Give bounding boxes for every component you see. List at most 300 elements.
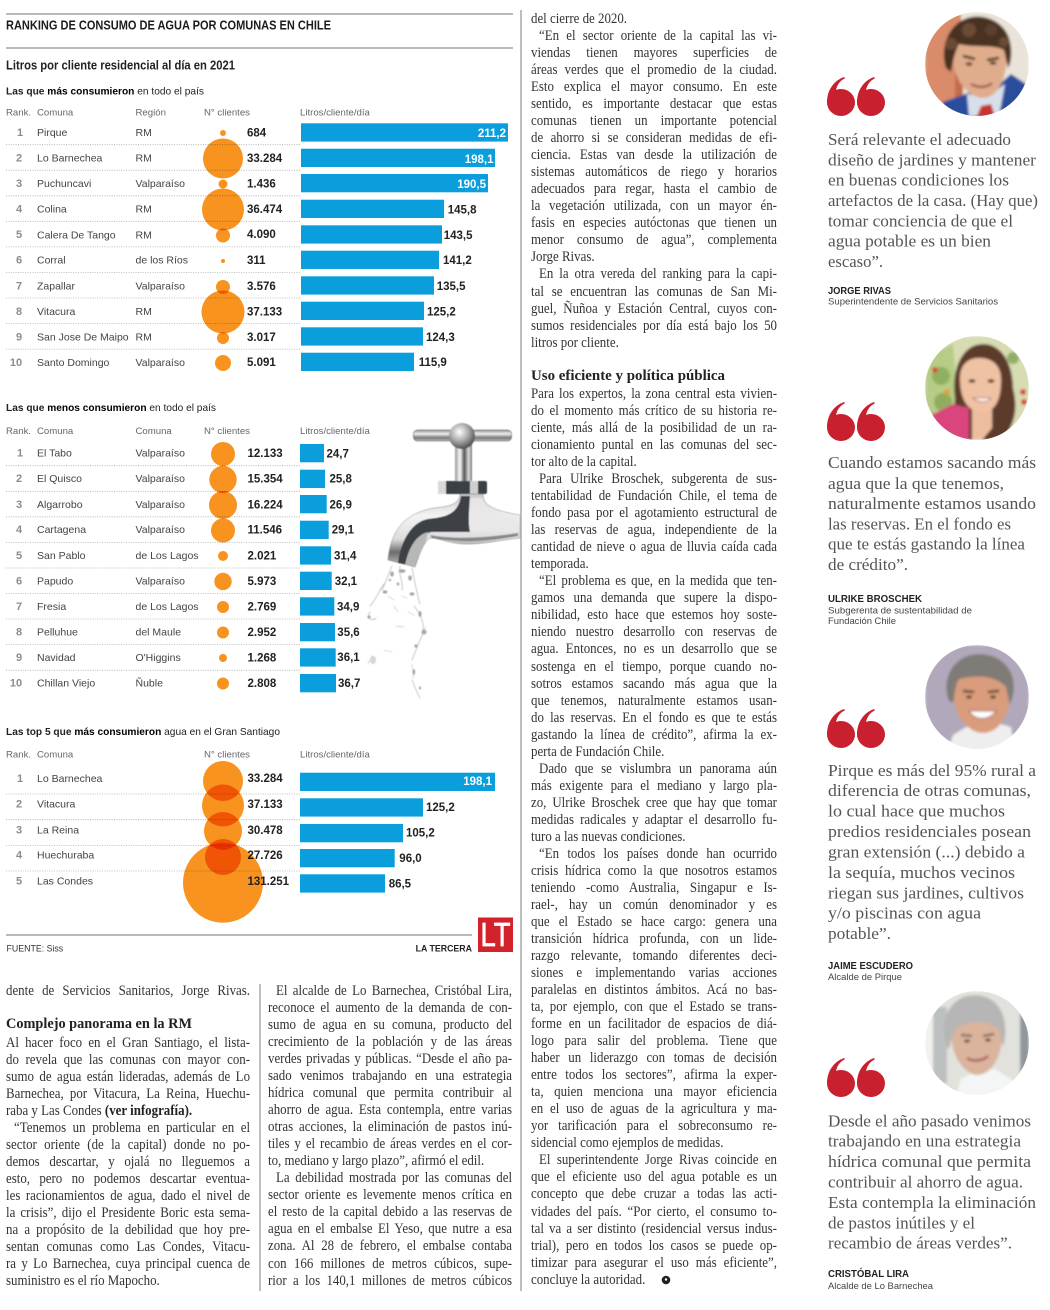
row: Lo Barnechea: 198,1	[463, 776, 493, 788]
row: Papudo: 6	[16, 576, 22, 588]
row: Fresia	[16, 597, 359, 616]
row: Algarrobo: Valparaíso	[136, 499, 185, 511]
quote text: naturalmente estamos usando	[828, 494, 1036, 513]
column headers: N° clientes	[204, 426, 250, 437]
row: El Tabo: 12.133	[248, 448, 283, 460]
column headers: Litros/cliente/día	[300, 108, 371, 118]
row: San Pablo: 2.021	[248, 550, 277, 562]
row: Lo Barnechea: 33.284	[248, 773, 283, 785]
row: Navidad	[16, 648, 360, 667]
row: Fresia: Fresia	[37, 601, 66, 613]
row: Las Condes	[16, 843, 412, 923]
text block: article column 2 top: adecuados para regar, hasta el cambio de	[531, 181, 777, 197]
text block: article column 2 top: del cierre de 2020.	[531, 11, 627, 27]
row: Corral: de los Ríos	[136, 254, 188, 266]
row: Vitacura: 125,2	[426, 802, 455, 814]
text block: article column 2 bottom: las reservas de agua, independiente de la	[531, 522, 777, 538]
text block: article column 2 bottom: niendo nuestro desarrollo con reservas de	[531, 624, 777, 640]
credit: La Tercera: LA TERCERA	[416, 944, 473, 954]
quote text: escaso”.	[828, 252, 883, 271]
text block: article column 2 bottom: Para los expertos, la zona central esta vivien-	[531, 386, 777, 402]
table heading: Las top 5 que más consumieron agua en el Gran Santiago	[6, 726, 280, 738]
text block: article column B: sumo de agua en su comuna, producto del	[268, 1017, 512, 1033]
row: San Pablo	[16, 546, 357, 565]
quote card: Jorge Rivas	[827, 12, 1038, 306]
row: El Quisco: 25,8	[330, 474, 352, 486]
row: Huechuraba: 27.726	[248, 850, 283, 862]
text block: article column A: demos descartar, y ojalá no lleguemos a	[6, 1154, 250, 1170]
attribution: Fundación Chile	[828, 616, 896, 626]
text block: article column 2 bottom: do el momento más crítico de su historia re-	[531, 403, 777, 419]
row: Algarrobo: 16.224	[248, 500, 283, 512]
quote text: lo cual hace que muchos	[828, 802, 1005, 820]
attribution	[828, 594, 972, 626]
text block: article column 2 top: ciencia. Estas van desde la utilización de	[531, 147, 777, 163]
row: Las Condes: Las Condes	[37, 876, 93, 888]
text block: article column A: raba y Las Condes (ver infografía).	[6, 1103, 192, 1119]
source line: FUENTE: Siss	[6, 944, 64, 954]
subtitle: Litros por cliente residencial al día en 2021	[6, 58, 235, 72]
row: Corral	[16, 251, 472, 269]
text block: article column 2 bottom: concluye la autoridad.	[531, 1272, 645, 1288]
quote card: Ulrike Broschek	[827, 336, 1036, 626]
row: El Quisco: 15.354	[248, 474, 283, 486]
row: Fresia: 7	[16, 601, 22, 613]
text block: article column A: na a propósito de la debilidad que hoy pre-	[6, 1222, 250, 1238]
quote text	[828, 453, 1036, 574]
row: Vitacura: 37.133	[248, 799, 283, 811]
text block: article column A: “Tenemos un problema en particular en el	[14, 1120, 250, 1136]
row: Colina: RM	[136, 204, 152, 216]
row: El Tabo: 24,7	[326, 448, 349, 460]
column headers: Rank.	[6, 108, 31, 118]
row: Cartagena: Cartagena	[37, 524, 86, 536]
text block: article column A: sector oriente (de la capital) donde no po-	[6, 1137, 250, 1153]
text block: article column B: zona. Al 28 de febrero, el embalse contaba	[268, 1238, 512, 1254]
text block: article column 2 bottom: cantidad de nieve o agua de lluvia caída cada	[531, 539, 777, 555]
row: Corral: 311	[247, 255, 266, 267]
row: Santo Domingo: Valparaíso	[136, 357, 185, 369]
row: Calera De Tango: 143,5	[444, 230, 473, 242]
quote text: predios residenciales posean	[828, 822, 1032, 841]
row: Fresia: 2.769	[248, 602, 276, 614]
row: Papudo: Valparaíso	[136, 576, 185, 588]
text block: article column 2 bottom: gastando la línea de crédito”, afirma la ex-	[531, 727, 777, 743]
row: Calera De Tango: 5	[16, 229, 22, 241]
attribution	[828, 1267, 934, 1291]
text block: article column 2 bottom: tal va a ser distinto (residencial versus indus-	[531, 1221, 777, 1237]
quote text: y/o piscinas con agua	[828, 904, 981, 922]
row: Santo Domingo: 5.091	[247, 357, 276, 369]
row: Corral: Corral	[37, 254, 66, 266]
text block: article column B: sado venimos trabajando en una estrategia	[268, 1068, 512, 1084]
text block: article column A: esto, pero no podemos descartar eventua-	[6, 1171, 250, 1187]
row: La Reina	[16, 812, 435, 850]
text block: article column 2 bottom: Para Ulrike Broschek, subgerenta de sus-	[539, 471, 777, 487]
row: Pirque: 1	[17, 127, 23, 139]
text block: article column 2 bottom: concepto que debe cruzar a todas las acti-	[531, 1186, 777, 1202]
text block: article column A end of previous story: dente de Servicios Sanitarios, Jorge Rivas.	[6, 983, 250, 999]
text block: article column A: les racionamientos de agua, dado el nivel de	[6, 1188, 250, 1204]
attribution: Subgerenta de sustentabilidad de	[828, 606, 972, 616]
text block: article column B: ahorro de agua. Esta contempla, entre varias	[268, 1102, 512, 1118]
text block: article column 2 bottom: que el eficiente uso del agua potable es un	[531, 1169, 777, 1185]
row: Lo Barnechea: Lo Barnechea	[37, 773, 103, 785]
row: Puchuncaví: 3	[16, 178, 22, 190]
row: Puchuncaví	[16, 174, 488, 192]
quote text: de crédito”.	[828, 555, 908, 574]
row: Chillan Viejo: Ñuble	[136, 676, 163, 690]
row: Las Condes: 5	[16, 876, 22, 888]
row: Calera De Tango: Calera De Tango	[37, 230, 116, 242]
text block: article column 2 top: la vegetación utilizada, con un mayor én-	[531, 198, 777, 214]
attribution: JORGE RIVAS	[828, 286, 891, 297]
heading: Complejo panorama: Complejo panorama en la RM	[6, 1016, 192, 1032]
text block: article column 2 bottom: paralelas en distintos ámbitos. Acá no bas-	[531, 982, 777, 998]
portrait: Jaime Escudero	[925, 645, 1029, 753]
column headers: Comuna	[37, 750, 74, 760]
column headers: N° clientes	[204, 108, 250, 118]
quote text: artefactos de la casa. (Hay que)	[828, 191, 1038, 210]
row: El Tabo: 1	[17, 448, 23, 460]
text block: article column B: La debilidad mostrada por las comunas del	[276, 1170, 512, 1186]
end mark icon	[662, 1276, 670, 1284]
column headers: Comuna	[37, 108, 74, 118]
column headers: Litros/cliente/día	[300, 426, 371, 437]
quote text: Cuando estamos sacando más	[828, 453, 1036, 472]
row: El Quisco: 2	[16, 473, 22, 485]
text block: article column 2 bottom: ta, por ejemplo, con que el Estado se trans-	[531, 999, 777, 1015]
text block: article column 2 top: Esto explica el mayor consumo. En este	[531, 79, 777, 95]
row: Corral: 6	[16, 254, 22, 266]
text block: article column A: sumo de agua están lideradas, además de Lo	[6, 1069, 250, 1085]
row: San Jose De Maipo: 3.017	[247, 332, 276, 344]
row: Las Condes: 86,5	[389, 878, 412, 890]
row: Cartagena: Valparaíso	[136, 524, 185, 536]
row: Fresia: de Los Lagos	[136, 601, 199, 613]
text block: article column 2 bottom: “El problema es que, en la medida que ten-	[539, 573, 777, 589]
attribution: Alcalde de Pirque	[828, 972, 902, 982]
row: Lo Barnechea: 33.284	[247, 153, 283, 165]
row: Pelluhue: del Maule	[136, 626, 181, 638]
row: Calera De Tango	[16, 225, 473, 244]
row: Puchuncaví: Valparaíso	[136, 178, 185, 190]
quote text: recambio de áreas verdes”.	[828, 1234, 1012, 1252]
row: El Tabo	[17, 442, 349, 466]
row: Zapallar: Valparaíso	[136, 280, 185, 292]
text block: article column 2 bottom: teniendo -como Australia, Singapur e Is-	[531, 880, 777, 896]
text block: article column 2 top: de ahorro si se consideran medidas de efi-	[531, 130, 777, 146]
column headers: Comuna	[136, 426, 172, 437]
row: Cartagena	[16, 518, 355, 542]
row: Navidad: 1.268	[248, 652, 277, 664]
text block: article column A: Barnechea, por Vitacura, La Reina, Huechu-	[6, 1086, 250, 1102]
text block: article column B: con 166 millones de metros cúbicos, supe-	[268, 1256, 512, 1272]
row: Cartagena: 4	[16, 524, 23, 536]
row: San Pablo: San Pablo	[37, 550, 86, 562]
row: Colina: 145,8	[448, 204, 477, 216]
text block: article column 2 bottom	[531, 386, 777, 1288]
row: Vitacura	[16, 290, 456, 334]
row: Lo Barnechea: 2	[16, 152, 22, 164]
row: Lo Barnechea	[16, 138, 495, 178]
icon: quotation mark	[827, 402, 885, 441]
quote text: Esta contempla la eliminación	[828, 1193, 1036, 1212]
attribution: Superintendente de Servicios Sanitarios	[828, 296, 998, 306]
column headers: Rank.	[6, 750, 31, 760]
row: Pirque: Pirque	[37, 127, 68, 139]
row: Huechuraba: Huechuraba	[37, 850, 94, 862]
quote text	[828, 761, 1036, 943]
text block: article column 2 bottom: temporada.	[531, 556, 589, 572]
row: Chillan Viejo: Chillan Viejo	[37, 678, 95, 690]
text block: article column 2 bottom: yor tarificación para el sobreconsumo re-	[531, 1118, 777, 1134]
text block: article column 2 bottom: medidas radicales y adaptar el desarrollo fu-	[531, 812, 777, 828]
text block: article column B: otras acciones, la eliminación de pastos inú-	[268, 1119, 512, 1135]
text block: article column 2 bottom: cionamiento puntal en las comunas del sec-	[531, 437, 777, 453]
row: Puchuncaví: 1.436	[247, 178, 276, 190]
row: Lo Barnechea: 198,1	[465, 154, 494, 166]
text block: article column 2 bottom: Dado que se vislumbra un panorama aún	[539, 761, 777, 777]
column headers: Comuna	[37, 426, 74, 437]
row: Pelluhue: 35,6	[337, 627, 360, 639]
text block: article column 2 top: comunas tienen un importante potencial	[531, 113, 777, 129]
column headers: Región	[136, 108, 166, 118]
row: El Quisco: El Quisco	[37, 473, 82, 485]
row: Puchuncaví: Puchuncavi	[37, 178, 91, 190]
row: Zapallar: 7	[16, 280, 22, 292]
text block: article column 2 bottom: El superintendente Jorge Rivas coincide en	[539, 1152, 777, 1168]
quote text: que te estás gastando la línea	[828, 535, 1025, 554]
row: Pelluhue: 8	[16, 626, 22, 638]
quote text: trabajando en una estrategia	[828, 1132, 1021, 1150]
row: Lo Barnechea: RM	[136, 152, 152, 164]
text block: article column 2 bottom: perta de Fundación Chile.	[531, 744, 664, 760]
text block: article column B: to, mediano y largo plazo”, afirmó el edil.	[268, 1153, 484, 1169]
text block: article column 2 top: guel, Ñuñoa y Estación Central, cuyos con-	[531, 301, 777, 317]
table heading: Las que más consumieron en todo el país	[6, 86, 204, 98]
row: San Pablo: de Los Lagos	[136, 550, 199, 562]
row: Huechuraba: 4	[16, 850, 23, 862]
icon: quotation mark	[827, 709, 885, 748]
text block: article column 2 bottom: do las reservas. En el fondo es que te estás	[531, 710, 777, 726]
row: Chillan Viejo: 10	[10, 678, 22, 690]
row: San Pablo: 31,4	[334, 550, 357, 562]
text block: article column 2 bottom: rael-, hay un común denominador y es	[531, 897, 777, 913]
attribution: Alcalde de Lo Barnechea	[828, 1281, 934, 1291]
text block: article column 2 top: fasis en especies autóctonas que tienen un	[531, 215, 777, 231]
row: Algarrobo: Algarrobo	[37, 499, 83, 511]
text block: article column 2 top: sumos residenciales por día está bajo los 50	[531, 318, 777, 334]
row: Huechuraba	[16, 839, 422, 875]
row: Chillan Viejo	[10, 674, 360, 692]
row: Pelluhue: 2.952	[248, 627, 276, 639]
portrait: Cristóbal Lira	[925, 991, 1029, 1099]
table heading: Las que menos consumieron en todo el país	[6, 402, 216, 414]
text block: article column B: crecimiento de la población y de las áreas	[268, 1034, 512, 1050]
text block: article column 2 bottom: transición hídrica profunda, con un lide-	[531, 931, 777, 947]
text block: article column 2 bottom: trial), pero en todos los casos se puede op-	[531, 1238, 777, 1254]
row: Cartagena: 11.546	[248, 524, 282, 536]
row: Chillan Viejo: 2.808	[248, 678, 277, 690]
row: Pirque: 211,2	[478, 128, 506, 140]
text block: article column 2 bottom: nibilidad, esto hace que estemos hoy soste-	[531, 607, 777, 623]
row: Las Condes: 131.251	[248, 876, 290, 888]
row: Navidad: Navidad	[37, 652, 76, 664]
row: San Jose De Maipo: 9	[16, 332, 22, 344]
text block: article column 2 bottom: forme en un facilitador de espacios de diá-	[531, 1016, 777, 1032]
text block: article column 2 bottom: razgo relevante, tomando diferentes deci-	[531, 948, 777, 964]
quote card: Jaime Escudero	[827, 645, 1036, 982]
row: La Reina: 30.478	[248, 825, 283, 837]
quote text: potable”.	[828, 924, 891, 943]
quote text: gran extensión (...) debido a	[828, 842, 1025, 861]
text block: article column 2 bottom: haber un liderazgo con tomas de decisión	[531, 1050, 777, 1066]
row: Navidad: 9	[16, 652, 22, 664]
row: Calera De Tango: RM	[136, 230, 152, 242]
attribution: ULRIKE BROSCHEK	[828, 594, 923, 605]
quote text: en buenas condiciones los	[828, 171, 1009, 190]
row: San Pablo: 5	[16, 550, 22, 562]
row: Corral: 141,2	[443, 255, 472, 267]
text block: article column 2 top	[531, 11, 777, 351]
quote text: las reservas. En el fondo es	[828, 514, 1011, 534]
row: Pelluhue: Pelluhue	[37, 626, 78, 638]
row: Navidad: O'Higgins	[136, 652, 181, 664]
row: El Tabo: Valparaíso	[136, 448, 185, 460]
row: Vitacura: Vitacura	[37, 798, 75, 810]
text block: article column 2 bottom: sostenga en el tiempo, porque cuando no-	[531, 658, 777, 674]
text block: article column 2 bottom: tor alto de la capital.	[531, 454, 637, 470]
text block: article column 2 bottom: vidades del país. “Por cierto, el consumo to-	[531, 1204, 777, 1220]
column separators	[260, 10, 521, 1291]
text block: article column A: do revela que las comunas con mayor con-	[6, 1052, 250, 1068]
row: El Quisco	[16, 466, 352, 493]
text block: article column 2 bottom: ciente, más allá de la posibilidad de un ra-	[531, 420, 777, 436]
attribution: JAIME ESCUDERO	[828, 961, 913, 972]
row: Vitacura: Vitacura	[37, 306, 75, 318]
text block: article column 2 top: menor consumo de agua”, complementa	[531, 232, 777, 248]
text block: article column B: El alcalde de Lo Barnechea, Cristóbal Lira,	[276, 983, 512, 999]
row: Lo Barnechea: Lo Barnechea	[37, 152, 103, 164]
text block: article column 2 top: áreas verdes que el promedio de la ciudad.	[531, 62, 777, 78]
row: Vitacura: 8	[16, 306, 22, 318]
text block: article column A: suministro es el río Mapocho.	[6, 1273, 160, 1289]
quote text: Desde el año pasado venimos	[828, 1112, 1031, 1130]
row: Vitacura	[16, 784, 455, 826]
row: Fresia: 34,9	[337, 602, 359, 614]
attribution	[828, 286, 998, 306]
quote text	[828, 130, 1038, 271]
text block: article column B: el resto de la capital debido a las reservas de	[268, 1204, 512, 1220]
row: Vitacura: 2	[16, 798, 22, 810]
row: Zapallar: 135,5	[437, 281, 466, 293]
title: RANKING DE CONSUMO DE AGUA POR COMUNAS EN CHILE	[6, 18, 331, 32]
text block: article column 2 bottom: sotros estamos sacando más agua que la	[531, 676, 777, 692]
row: La Reina: La Reina	[37, 824, 79, 836]
row: Papudo	[16, 572, 358, 590]
row: Zapallar	[16, 276, 466, 295]
row: Papudo: 5.973	[248, 576, 276, 588]
row: Papudo: Papudo	[37, 576, 73, 588]
text block: article column B: hídrica comunal que permita contribuir al	[268, 1085, 512, 1101]
text block: article column 2 bottom: timizar para asegurar el uso más eficiente”,	[531, 1255, 777, 1271]
attribution	[828, 961, 913, 982]
column headers	[6, 426, 371, 437]
quote text: riegan sus jardines, cultivos	[828, 883, 1024, 902]
column headers: N° clientes	[204, 750, 250, 760]
text block: article column A	[6, 1035, 250, 1289]
row: San Jose De Maipo: 124,3	[426, 332, 455, 344]
row: Huechuraba: 96,0	[399, 853, 422, 865]
text block: article column B: tiles y el recambio de áreas verdes en el cor-	[268, 1136, 512, 1152]
text block: article column 2 top: tal se encuentran las comunas de San Mi-	[531, 284, 777, 300]
row: Santo Domingo	[10, 353, 447, 371]
column headers: Rank.	[6, 426, 31, 437]
text block: article column 2 bottom: que tenemos, naturalmente estamos usan-	[531, 693, 777, 709]
text block: article column 2 bottom: tentabilidad de Fundación Chile, el tema de	[531, 488, 777, 504]
text block: article column 2 top: Jorge Rivas.	[531, 249, 595, 265]
quote text: Pirque es más del 95% rural a	[828, 761, 1036, 780]
column headers	[6, 108, 371, 118]
row: Papudo: 32,1	[335, 576, 358, 588]
text block: article column B: verdes privadas y públicas. “Desde el año pa-	[268, 1051, 512, 1067]
row: Colina	[16, 188, 477, 230]
row: Santo Domingo: Santo Domingo	[37, 357, 110, 369]
text block: article column 2 bottom: “En todos los países donde han ocurrido	[539, 846, 777, 862]
text block: article column 2 top: “En el sector oriente de la capital las vi-	[539, 28, 777, 44]
row: Pirque	[17, 123, 508, 142]
quote text: contribuir al ahorro de agua.	[828, 1172, 1023, 1192]
text block: article column A: sentan comunas como Las Condes, Vitacu-	[6, 1239, 250, 1255]
heading: Uso eficiente: Uso eficiente y política pública	[531, 368, 726, 384]
text block: article column 2 bottom: zo, Ulrike Broschek cree que hay que tomar	[531, 795, 777, 811]
table: top 5 Gran Santiago	[6, 726, 495, 923]
infographic panel: water ranking	[6, 14, 520, 954]
row: Vitacura: 125,2	[427, 306, 456, 318]
row: Colina: Colina	[37, 204, 67, 216]
text block: article column 2 bottom: crisis hídrica como la que nosotros estamos	[531, 863, 777, 879]
text block: article column 2 bottom: que el Estado se hace cargo: genera una	[531, 914, 777, 930]
column headers: Litros/cliente/día	[300, 750, 371, 760]
quote text: diferencia de otras comunas,	[828, 781, 1031, 800]
quote text: tomar conciencia de que el	[828, 211, 1013, 230]
row: Calera De Tango: 4.090	[247, 229, 276, 241]
row: Zapallar: 3.576	[247, 281, 276, 293]
text block: article column 2 bottom: fondo pasa por el agotamiento estructural de	[531, 505, 777, 521]
text block: article column 2 bottom: logo para salir del problema. Tiene que	[531, 1033, 777, 1049]
row: Algarrobo: 3	[16, 499, 22, 511]
text block: article column 2 bottom: más exigente para el mediano y largo pla-	[531, 778, 777, 794]
quote text: agua que la que tenemos,	[828, 474, 1004, 493]
portrait: Ulrike Broschek	[925, 336, 1029, 440]
table: las que menos consumieron	[6, 402, 371, 692]
attribution: CRISTÓBAL LIRA	[828, 1267, 909, 1280]
text block: article column 2 top: En la otra vereda del ranking para la capi-	[539, 266, 777, 282]
text block: article column 2 bottom: agua. Entonces, no es un desarrollo que se	[531, 641, 777, 657]
row: Zapallar: Zapallar	[37, 280, 75, 292]
text block: article column B: rior a los 140,1 millones de metros cúbicos	[268, 1273, 512, 1289]
row: Colina: 4	[16, 204, 23, 216]
text block: article column 2 top: viendas tienen mayores superficies de	[531, 45, 777, 61]
quote text: diseño de jardines y mantener	[828, 150, 1036, 169]
row: Cartagena: 29,1	[332, 524, 355, 536]
row: Lo Barnechea: 1	[17, 773, 23, 785]
row: San Jose De Maipo: San Jose De Maipo	[37, 332, 129, 344]
row: Santo Domingo: 115,9	[419, 357, 447, 369]
text block: article column 2 bottom: turo a las nuevas condiciones.	[531, 829, 685, 845]
text block: article column 2 bottom: gamos una demanda que supere la dispo-	[531, 590, 777, 606]
